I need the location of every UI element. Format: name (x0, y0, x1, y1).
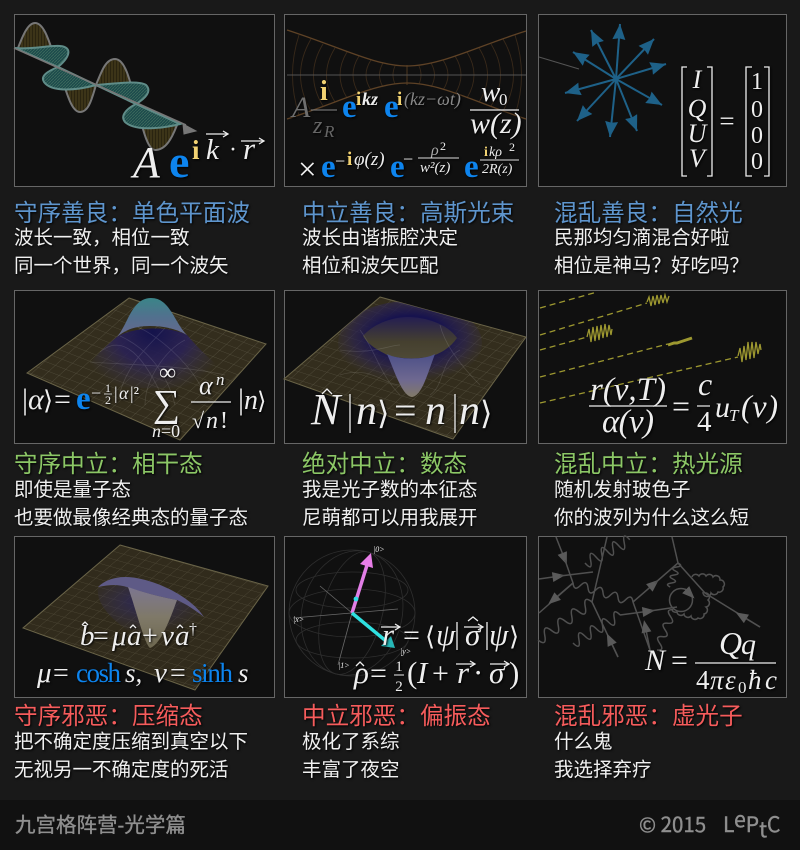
formula: Stokes vector: 0 (751, 97, 763, 123)
formula: Stokes vector: 0 (751, 149, 763, 175)
diagram: random wave trains (540, 292, 761, 403)
formula: Bogoliubov transformation: μ (36, 657, 52, 689)
formula: coherent state expansion: ! (220, 408, 228, 434)
panel: true neutral, number state (284, 290, 526, 444)
formula: Bloch vector and density matrix: I (416, 655, 429, 690)
formula: coherent state expansion: ⟩ (43, 386, 53, 415)
caption: neutral good: 相位和波矢匹配 (302, 255, 439, 277)
formula: Bloch vector and density matrix: ) (509, 655, 519, 690)
formula: number operator eigenvalue: N (310, 385, 343, 434)
formula: virtual photon number: 0 (738, 678, 746, 697)
formula: Bogoliubov transformation: = (93, 621, 109, 652)
caption: lawful good: 守序善良：单色平面波 (14, 200, 250, 227)
formula: Bloch vector and density matrix: = (403, 619, 420, 652)
formula: A e^(i k·r): · (229, 137, 237, 163)
formula: coherent state expansion: − (91, 383, 101, 403)
caption: lawful evil: 无视另一不确定度的死活 (14, 759, 229, 781)
formula: coherent state expansion: n (244, 385, 258, 416)
formula: gaussian beam field: i (484, 145, 488, 160)
formula: Bogoliubov transformation: † (189, 621, 197, 638)
formula: Bloch vector and density matrix: + (432, 657, 449, 690)
caption: lawful neutral: 也要做最像经典态的量子态 (14, 507, 248, 529)
formula: gaussian beam field: e (384, 89, 399, 125)
caption: neutral evil: 丰富了夜空 (302, 759, 400, 781)
formula: coherent state expansion: |² (130, 383, 139, 403)
formula: Bogoliubov transformation: ν (161, 620, 174, 652)
formula: Stokes vector: Q (688, 94, 707, 123)
formula: coherent state expansion: n (152, 421, 161, 441)
caption: lawful evil: 守序邪恶：压缩态 (14, 703, 203, 730)
formula: number operator eigenvalue: n (459, 388, 480, 434)
formula: gaussian beam field: i (347, 149, 352, 170)
formula: virtual photon number: N (644, 644, 667, 677)
formula: Bloch vector and density matrix: σ (465, 617, 482, 652)
formula: Bogoliubov transformation: μ (111, 620, 127, 652)
footer bar (0, 800, 800, 850)
formula: Kirchhoff law of thermal radiation (589, 366, 778, 440)
caption: lawful good: 同一个世界，同一个波矢 (14, 255, 229, 277)
formula: Bloch vector and density matrix: ρ (353, 655, 369, 690)
author signature: C (767, 809, 780, 839)
panel: lawful evil, squeezed state (14, 536, 274, 698)
formula: Bogoliubov transformation: + (142, 621, 158, 652)
formula: virtual photon number: ħ (748, 665, 762, 695)
formula: gaussian beam field (290, 76, 522, 188)
diagram: squeezed state surface (23, 545, 268, 690)
formula: Bloch vector and density matrix: ψ (489, 617, 509, 652)
formula: coherent state expansion: = (54, 383, 71, 416)
formula: gaussian beam field: e (390, 149, 405, 185)
caption: lawful good: 波长一致，相位一致 (14, 227, 190, 249)
formula: Bloch vector and density matrix: ψ (436, 617, 456, 652)
formula: Bloch vector and density matrix: 2 (395, 679, 403, 695)
formula: Stokes vector (682, 65, 769, 176)
caption: chaotic good: 混乱善良：自然光 (554, 200, 743, 227)
formula: Bloch vector and density matrix: · (473, 655, 483, 690)
formula: virtual photon number: π (710, 665, 725, 695)
formula: A e^(i k·r): i (192, 135, 200, 165)
formula: Kirchhoff law of thermal radiation: (ν) (741, 388, 778, 424)
formula: Stokes vector: = (719, 106, 735, 136)
formula: coherent state expansion: n (206, 408, 218, 434)
formula: Bogoliubov transformation: b (80, 620, 94, 652)
caption: lawful neutral: 守序中立：相干态 (14, 451, 203, 478)
formula: number operator eigenvalue: n (356, 388, 377, 434)
formula: Bogoliubov transformation: s, (125, 658, 142, 688)
formula: Bloch vector and density matrix: = (370, 657, 387, 690)
formula: Bogoliubov transformation: = (53, 658, 69, 689)
formula: Stokes vector: U (688, 119, 709, 148)
formula: coherent state expansion: | (238, 383, 244, 416)
author signature: L (723, 809, 734, 839)
formula: gaussian beam field: ρ (430, 142, 439, 159)
caption: neutral evil (302, 703, 491, 781)
caption: chaotic evil (554, 703, 743, 781)
caption: chaotic neutral: 混乱中立：热光源 (554, 451, 743, 478)
formula: virtual photon number: 4 (696, 665, 710, 695)
formula: coherent state expansion (22, 360, 266, 441)
caption: neutral good: 波长由谐振腔决定 (302, 227, 458, 249)
formula: coherent state expansion: α (199, 371, 214, 400)
formula: Bloch vector and density matrix: ( (407, 655, 417, 690)
formula: number operator eigenvalue: ⟩ (377, 395, 389, 431)
formula: Stokes vector: I (692, 65, 703, 94)
formula: Stokes vector: V (689, 144, 708, 173)
caption: neutral evil: 极化了系综 (302, 731, 400, 753)
formula: gaussian beam field: i (320, 76, 328, 107)
formula: A e^(i k·r): r (243, 131, 256, 166)
caption: true neutral (302, 451, 478, 529)
formula: Stokes vector: 0 (751, 123, 763, 149)
formula: Kirchhoff law of thermal radiation: = (672, 388, 690, 424)
formula: Bogoliubov transformation (36, 620, 249, 689)
caption: chaotic neutral: 你的波列为什么这么短 (554, 507, 749, 529)
formula: Kirchhoff law of thermal radiation: c (698, 366, 712, 402)
caption: lawful good (14, 200, 250, 277)
formula: coherent state expansion: ∞ (159, 360, 176, 386)
caption: true neutral: 我是光子数的本征态 (302, 479, 478, 501)
formula: A e^(i k·r): k (206, 134, 220, 166)
formula: gaussian beam field: φ(z) (354, 149, 385, 170)
formula: Bloch vector and density matrix: r (382, 617, 395, 652)
formula: Bogoliubov transformation: cosh (76, 658, 122, 688)
formula: Kirchhoff law of thermal radiation: α(ν) (602, 404, 654, 440)
caption: lawful evil (14, 703, 248, 781)
formula: Bloch vector and density matrix (353, 617, 519, 695)
caption: neutral good: 中立善良：高斯光束 (302, 200, 514, 227)
formula: Bogoliubov transformation: a (175, 620, 190, 652)
caption: neutral good (302, 200, 514, 277)
caption: chaotic evil: 什么鬼 (554, 731, 613, 753)
diagram: fock state surface (284, 297, 526, 439)
caption: chaotic evil: 我选择弃疗 (554, 759, 652, 781)
caption: chaotic good (554, 200, 749, 277)
formula: gaussian beam field: R (323, 122, 335, 141)
formula: Bogoliubov transformation: s (238, 658, 249, 688)
formula: gaussian beam field: − (335, 151, 345, 171)
formula: A e^(i k·r): A (130, 138, 161, 187)
diagram: Bloch sphere: |y> (400, 647, 411, 656)
formula: Kirchhoff law of thermal radiation: u (715, 391, 730, 424)
panel: chaotic evil, virtual photon (538, 536, 786, 698)
formula: gaussian beam field: × (298, 152, 317, 188)
caption: lawful evil: 把不确定度压缩到真空以下 (14, 731, 248, 753)
formula: number operator eigenvalue: n (425, 388, 446, 434)
formula: gaussian beam field: w(z) (470, 107, 522, 140)
formula: number operator eigenvalue: ⟩ (480, 395, 492, 431)
caption: true neutral: 绝对中立：数态 (302, 451, 467, 478)
panel: lawful good, plane wave (14, 14, 274, 187)
formula: A e^(i k·r): e (169, 136, 189, 187)
panel: chaotic good, natural light (538, 14, 786, 186)
formula: gaussian beam field: w²(z) (420, 160, 450, 176)
formula: Bloch vector and density matrix: ⟩ (509, 622, 519, 651)
formula: gaussian beam field: − (403, 149, 413, 169)
formula: gaussian beam field: kρ (489, 145, 502, 160)
diagram: Bloch sphere: |1> (338, 661, 350, 670)
formula: coherent state expansion: 1 (105, 381, 111, 395)
formula: coherent state expansion: =0 (161, 421, 180, 441)
formula: Bogoliubov transformation: sinh (192, 658, 234, 688)
formula: coherent state expansion: ∑ (153, 383, 180, 425)
caption: neutral evil: 中立邪恶：偏振态 (302, 703, 491, 730)
formula: virtual photon number: Q (719, 625, 742, 661)
caption: true neutral: 尼萌都可以用我展开 (302, 507, 478, 529)
formula: Bloch vector and density matrix: ⟨ (425, 622, 435, 651)
author signature: e (734, 804, 746, 834)
formula: Bloch vector and density matrix: 1 (395, 659, 403, 675)
diagram: Feynman diagram (538, 536, 760, 657)
formula: gaussian beam field: z (312, 113, 323, 139)
formula: coherent state expansion: √ (192, 408, 205, 433)
formula: virtual photon number: ε (725, 665, 736, 695)
diagram: electromagnetic plane wave (14, 23, 196, 150)
formula: number operator eigenvalue: = (394, 388, 417, 433)
formula: coherent state expansion: α (28, 383, 45, 416)
formula: number operator eigenvalue (310, 385, 492, 434)
formula: gaussian beam field: w (481, 76, 501, 108)
panel: chaotic neutral, thermal source (538, 290, 786, 444)
formula: Bogoliubov transformation: = (170, 658, 186, 689)
panel: neutral good, gaussian beam (284, 14, 526, 188)
formula: gaussian beam field: kz (362, 89, 378, 109)
formula: Bogoliubov transformation: ν (154, 657, 167, 689)
formula: coherent state expansion: e (76, 381, 91, 417)
formula: Kirchhoff law of thermal radiation: 4 (697, 406, 712, 438)
caption: chaotic neutral (554, 451, 749, 529)
caption: chaotic neutral: 随机发射玻色子 (554, 479, 691, 501)
formula: gaussian beam field: i (356, 89, 361, 110)
panel: neutral evil, polarization state (284, 536, 526, 698)
formula: gaussian beam field: 0 (499, 90, 508, 109)
formula: gaussian beam field: e (321, 149, 336, 185)
diagram: Bloch sphere: |x> (293, 615, 304, 624)
author signature: t (759, 814, 767, 844)
formula: coherent state expansion: ⟩ (257, 389, 266, 415)
formula: gaussian beam field: A (290, 91, 311, 124)
diagram: gaussian surface on a grid (27, 298, 266, 440)
caption: lawful neutral: 即使是量子态 (14, 479, 131, 501)
formula: gaussian beam field: 2R(z) (482, 162, 513, 177)
footer title: 九宫格阵营-光学篇 (15, 814, 186, 837)
formula: coherent state expansion: | (114, 383, 118, 403)
formula: A e^(i k·r) (130, 131, 264, 187)
formula: Stokes vector: 1 (751, 69, 763, 95)
author signature: P (746, 809, 759, 839)
formula: virtual photon number (644, 625, 777, 697)
formula: Bloch vector and density matrix: r (457, 655, 470, 690)
formula: Kirchhoff law of thermal radiation: T (729, 406, 740, 425)
caption: lawful neutral (14, 451, 248, 529)
formula: virtual photon number: = (671, 644, 688, 677)
formula: virtual photon number: c (765, 665, 777, 695)
formula: gaussian beam field: 2 (509, 140, 515, 154)
panel: lawful neutral, coherent state (14, 290, 274, 444)
copyright: © 2015 (639, 808, 706, 838)
diagram: random polarization arrows (539, 24, 666, 137)
formula: coherent state expansion: α (119, 383, 129, 403)
formula: gaussian beam field: 2 (440, 139, 446, 153)
formula: gaussian beam field: e (464, 149, 479, 185)
formula: virtual photon number: q (741, 628, 756, 661)
formula: Bloch vector and density matrix: σ (489, 655, 506, 690)
formula: coherent state expansion: n (216, 370, 224, 389)
formula: coherent state expansion: | (22, 383, 28, 416)
formula: Kirchhoff law of thermal radiation: r(ν,T) (590, 372, 666, 408)
formula: gaussian beam field: e (342, 89, 357, 125)
diagram: gaussian beam waist (287, 30, 526, 119)
caption: chaotic good: 相位是神马？好吃吗？ (554, 255, 749, 277)
formula: Bogoliubov transformation: a (127, 620, 142, 652)
diagram: Bloch sphere (287, 539, 417, 687)
formula: coherent state expansion: 2 (105, 393, 111, 407)
caption: chaotic evil: 混乱邪恶：虚光子 (554, 703, 743, 730)
caption: chaotic good: 民那均匀滴混合好啦 (554, 227, 730, 249)
formula: gaussian beam field: (kz−ωt) (404, 89, 461, 110)
formula: gaussian beam field: i (397, 89, 402, 110)
diagram: Bloch sphere: |0> (373, 545, 385, 554)
